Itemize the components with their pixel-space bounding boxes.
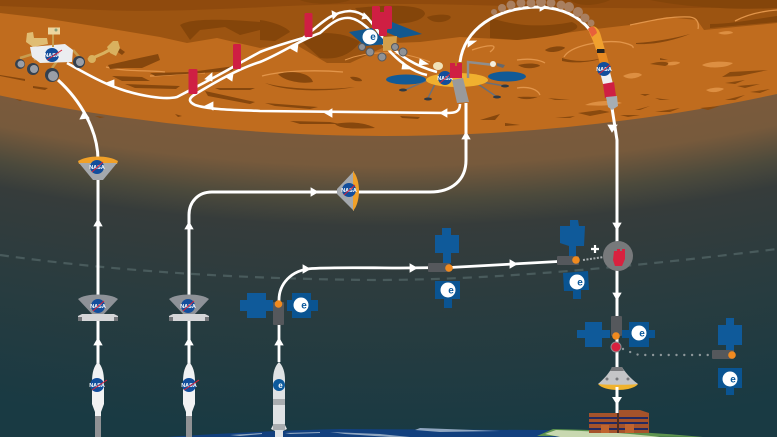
lander feet xyxy=(399,84,509,100)
engine xyxy=(728,351,736,359)
NASA logo: NASA xyxy=(180,304,196,310)
Earth entry capsule xyxy=(598,367,638,412)
bottom solar panel xyxy=(718,368,742,395)
entry capsule, horizontal flight xyxy=(337,171,359,211)
launch rocket 3 xyxy=(271,362,287,437)
route: fetch rover entry path xyxy=(189,103,466,437)
orbiter body xyxy=(611,316,622,336)
sample tube on route xyxy=(304,13,312,37)
bottom solar panel xyxy=(563,271,589,299)
ESA logo: e xyxy=(639,328,645,340)
solar panel right xyxy=(287,293,318,318)
dotted return trajectory xyxy=(623,349,710,355)
route: samples to return orbiter and Earth xyxy=(612,108,617,415)
cruise stage 1 xyxy=(78,294,118,321)
Mars surface xyxy=(0,0,777,136)
land xyxy=(537,429,703,437)
route: traverse from first rover to the lander xyxy=(67,11,437,98)
ESA logo: e xyxy=(730,374,736,386)
lander arm xyxy=(468,62,494,78)
terrain: far band xyxy=(0,0,777,63)
lander mast head xyxy=(433,62,443,70)
ESA logo: e xyxy=(278,381,283,390)
rocket sample section xyxy=(603,82,616,98)
engine xyxy=(445,264,453,272)
lander solar panels xyxy=(386,74,426,84)
cruise platform xyxy=(169,314,209,321)
lander deck xyxy=(426,73,488,87)
terrain: small craters xyxy=(585,31,733,106)
top solar panel xyxy=(435,228,459,263)
sample tube on route xyxy=(188,69,198,94)
terrain: dark top strip xyxy=(0,0,777,11)
Earth surface xyxy=(167,428,703,437)
heat shield xyxy=(78,156,118,164)
sample lander xyxy=(386,61,526,103)
backshell xyxy=(79,163,117,180)
rocket nose xyxy=(606,96,618,110)
rover solar panels xyxy=(349,28,388,46)
sample collecting rover xyxy=(15,28,120,82)
orbit dashed line xyxy=(0,249,777,280)
sample capsule xyxy=(611,342,621,352)
orbiter body xyxy=(428,263,450,272)
bottom solar panel xyxy=(435,281,460,308)
ESA logo: e xyxy=(577,278,583,288)
solar panel left xyxy=(577,322,610,347)
terrain: light crater rims xyxy=(106,10,777,95)
NASA logo: NASA xyxy=(90,304,106,310)
terrain: shadow patches xyxy=(180,0,777,58)
rover wheel struts xyxy=(20,50,80,68)
backshell xyxy=(337,171,354,211)
cruise platform xyxy=(78,314,118,321)
route: ascent arc xyxy=(460,7,590,62)
ascent rocket xyxy=(588,26,618,110)
return orbiter with captured sample xyxy=(577,316,655,352)
return orbiter at launch xyxy=(240,293,318,325)
plus sign xyxy=(591,245,599,253)
rocket first stage xyxy=(597,53,609,64)
solar panel left xyxy=(240,293,273,318)
ascent vehicle platform xyxy=(452,78,469,103)
smoke trail of ascent xyxy=(491,0,594,26)
orbiting sample container xyxy=(603,241,633,271)
lander sample tubes xyxy=(450,63,462,78)
ESA logo: e xyxy=(370,32,376,43)
ESA logo: e xyxy=(301,300,307,312)
route: rover 1 ascent path xyxy=(58,80,98,437)
engine xyxy=(275,300,282,308)
sample receiving facility building xyxy=(589,410,649,433)
NASA logo: NASA xyxy=(89,165,105,171)
entry capsule, Mars atmosphere xyxy=(78,156,118,180)
rover wheels xyxy=(15,56,85,82)
route: fetch rover loop xyxy=(190,18,460,113)
route: orbiter launch path xyxy=(279,262,558,362)
solar panel right xyxy=(622,322,655,347)
departing orbiter xyxy=(712,318,742,395)
rover body xyxy=(383,36,397,51)
NASA logo: NASA xyxy=(181,383,197,389)
ocean xyxy=(167,429,600,437)
engine xyxy=(612,332,620,340)
top solar panel xyxy=(718,318,742,351)
launch rocket 1 xyxy=(89,362,107,437)
sample tubes xyxy=(613,249,625,266)
orbiter body xyxy=(557,256,579,265)
rover mast xyxy=(52,34,54,47)
rocket nozzle xyxy=(597,49,604,53)
launch rocket 2 xyxy=(181,362,199,437)
NASA logo: NASA xyxy=(437,76,453,82)
engine xyxy=(572,256,580,264)
rover wheels xyxy=(358,44,407,61)
terrain: dark rock streaks xyxy=(0,34,690,129)
return orbiter near sample xyxy=(557,220,604,299)
NASA logo: NASA xyxy=(44,53,60,59)
orbiter body xyxy=(273,302,284,325)
lander legs xyxy=(405,80,505,98)
rocket flame xyxy=(588,26,605,50)
cruise stage 2 xyxy=(169,294,209,321)
rover robotic arm xyxy=(88,47,115,60)
rocket second stage xyxy=(600,72,613,84)
return orbiter on transfer xyxy=(428,228,460,308)
sample tube on route xyxy=(233,44,241,69)
rover rear equipment xyxy=(26,32,48,47)
capture dots xyxy=(583,257,604,260)
ESA logo: e xyxy=(448,286,454,296)
top solar panel xyxy=(560,220,585,258)
orbiter body xyxy=(712,350,734,359)
NASA logo: NASA xyxy=(341,188,357,194)
rover body xyxy=(30,44,73,63)
clouds xyxy=(230,428,500,437)
collected sample tubes xyxy=(372,6,392,36)
aeroshell xyxy=(78,294,118,315)
heat shield xyxy=(353,171,359,211)
aeroshell xyxy=(169,294,209,315)
arrows on routes xyxy=(80,3,621,345)
NASA logo: NASA xyxy=(596,67,612,73)
sample retrieval rover xyxy=(349,6,422,61)
NASA logo: NASA xyxy=(89,383,105,389)
